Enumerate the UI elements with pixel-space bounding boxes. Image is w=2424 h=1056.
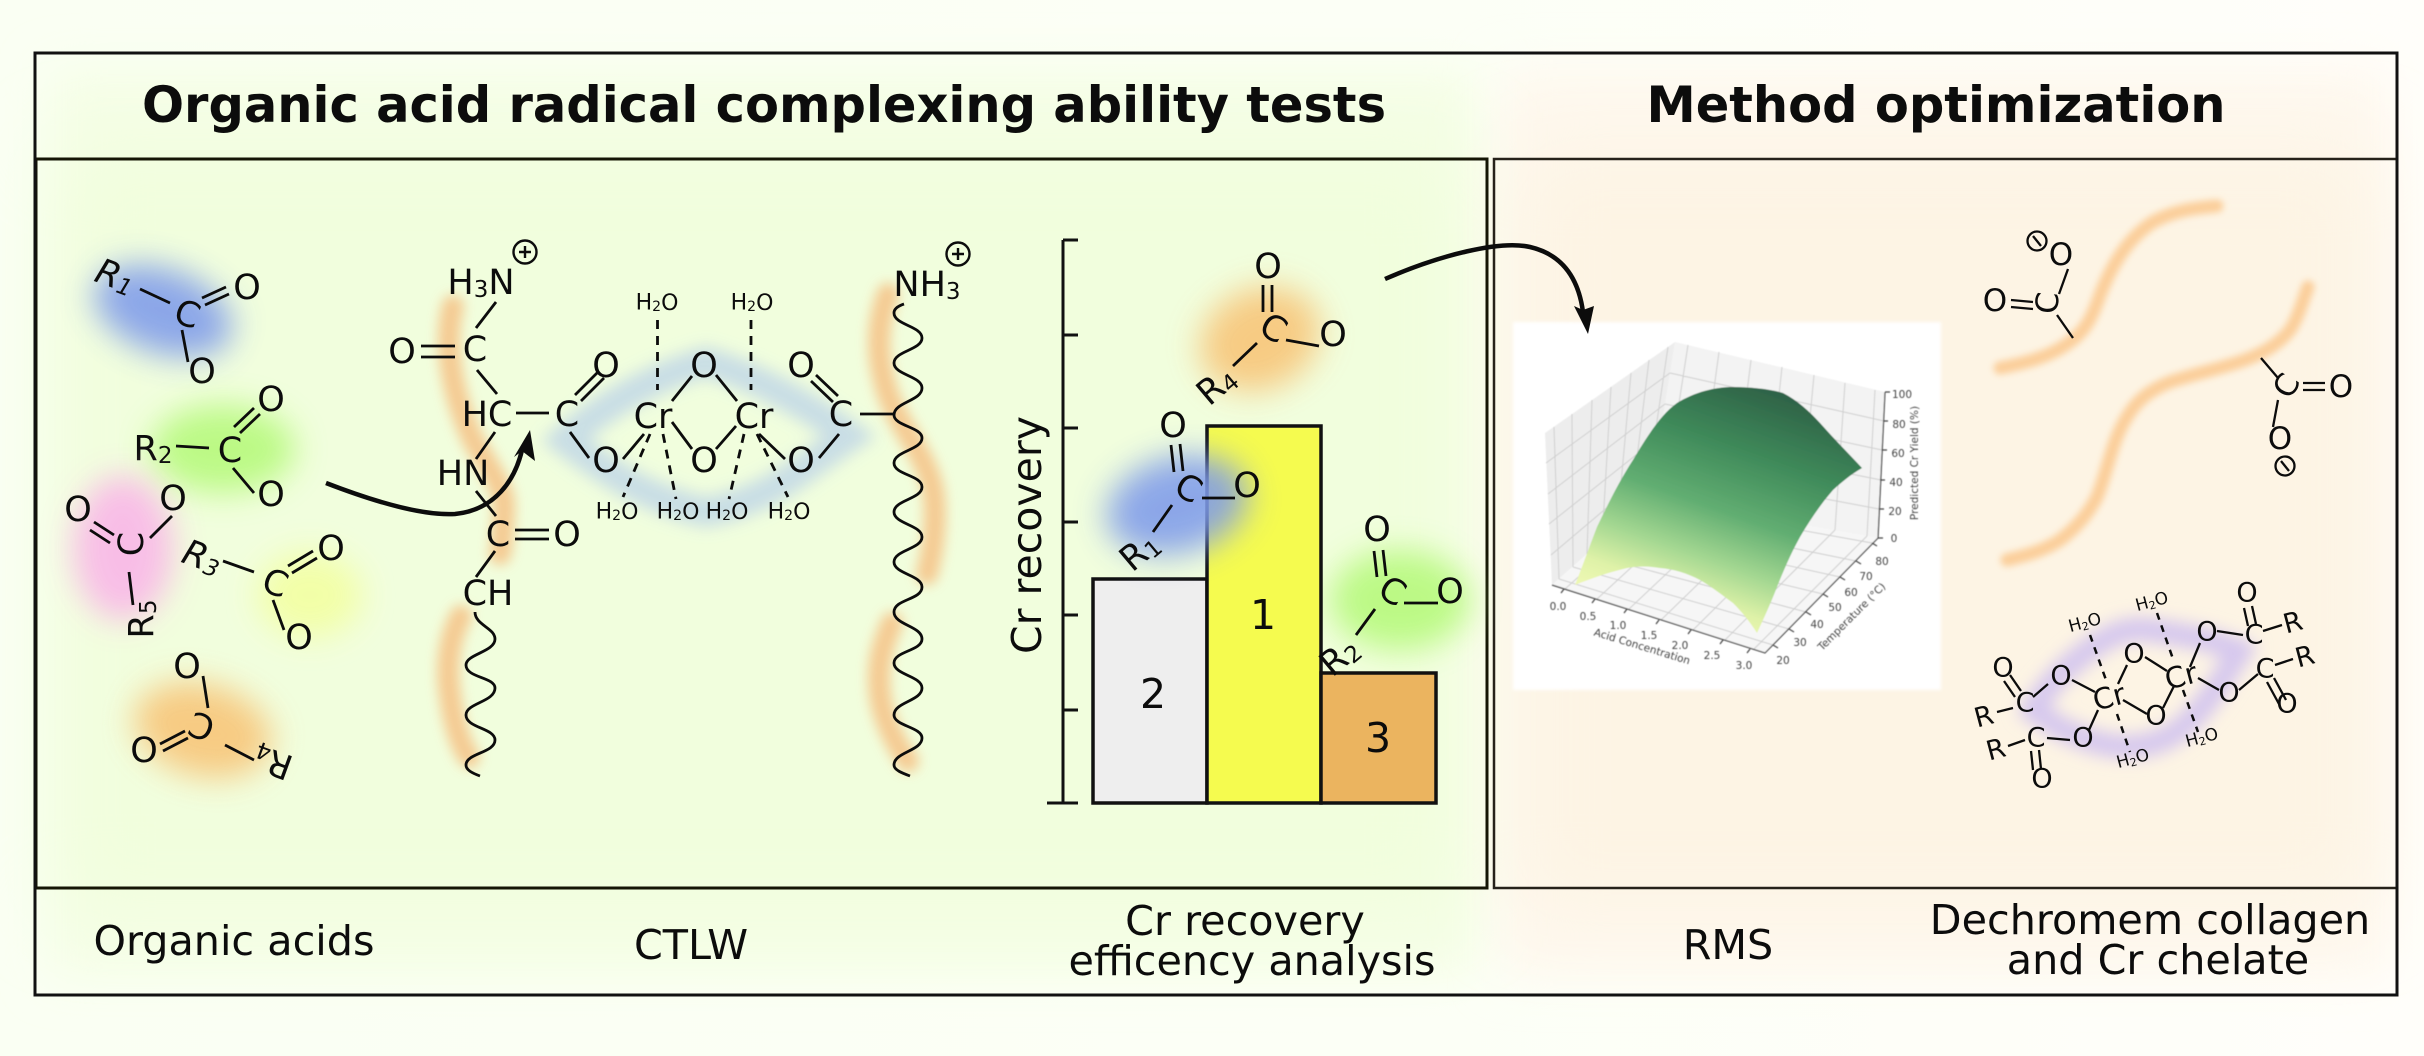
molecule: R3 carboxyl: O (317, 529, 345, 569)
CTLW atom labels: O (731, 500, 748, 524)
molecule: CTLW chromium tanned collagen (388, 240, 970, 776)
molecule: R5 carboxyl: 5 (136, 600, 162, 614)
molecule: carboxylate right: O (2329, 369, 2353, 405)
molecule: R5 carboxyl: O (64, 490, 92, 530)
molecule: Cr chelate: H (2114, 750, 2132, 773)
CTLW atom labels: Cr (735, 397, 774, 437)
molecule: R2 carboxyl (134, 380, 295, 515)
molecule: R4 on chart: O (1319, 315, 1347, 355)
molecule: carboxylate right: C (2266, 368, 2308, 404)
CTLW atom labels: 2 (784, 508, 793, 524)
3D chart labels: 30 (1793, 637, 1807, 649)
CTLW atom labels: 3 (474, 277, 488, 303)
molecule: R1 carboxyl: C (169, 292, 205, 338)
y axis with ticks (1047, 240, 1078, 803)
3D chart labels: 2.0 (1672, 640, 1688, 652)
side chain wavy lines (466, 612, 495, 776)
3D chart labels: 2.5 (1704, 650, 1720, 662)
molecule: Cr chelate: O (2134, 745, 2152, 768)
molecule: R1 on chart: 1 (1140, 535, 1168, 564)
arrow: chart to RMS (1385, 245, 1594, 334)
molecule: carboxylate upper left (1983, 232, 2073, 338)
molecule: R3 carboxyl: 3 (200, 554, 222, 583)
caption: dechromem collagen and Cr chelate (1930, 896, 2370, 984)
3D chart labels: 3.0 (1736, 660, 1752, 672)
molecule: R4 carboxyl: R (262, 741, 298, 786)
CTLW atom labels: O (388, 332, 416, 372)
CTLW atom labels: NH (893, 265, 946, 305)
CTLW atom labels: O (621, 500, 638, 524)
molecule: carboxylate right: O (2268, 421, 2292, 457)
molecule: R1 carboxyl: O (188, 352, 216, 392)
icon: positive charge right (946, 242, 970, 266)
molecule: Cr chelate: O (2196, 616, 2218, 648)
molecule: Cr chelate: O (2072, 722, 2094, 754)
3D chart labels: 0 (1891, 533, 1897, 545)
3D chart labels: 20 (1776, 655, 1790, 667)
molecule: Cr chelate: C (2245, 620, 2263, 650)
molecule: Cr chelate: R (2292, 640, 2318, 674)
3D chart labels: 60 (1844, 587, 1858, 599)
3D chart labels: Predicted Cr Yield (%) (1909, 406, 1921, 520)
molecule: R1 carboxyl: O (233, 268, 261, 308)
molecule: Cr chelate: H (2066, 614, 2084, 637)
caption: dechromem collagen and Cr chelate: and Cr chelate (2007, 936, 2309, 984)
molecule: Cr chelate: O (2153, 588, 2171, 611)
3D chart labels: 0.5 (1580, 611, 1596, 623)
molecule: R3 carboxyl: R (177, 533, 213, 578)
CTLW atom labels: 2 (673, 508, 682, 524)
caption: Cr recovery efficency analysis: efficency analysis (1068, 937, 1436, 985)
molecule: Cr chelate: O (2203, 724, 2221, 747)
CTLW atom labels: C (829, 395, 853, 435)
molecule: R1 carboxyl: R (90, 252, 126, 297)
molecule: R2 on chart: R (1312, 639, 1357, 685)
molecule: Cr chelate: C (2256, 654, 2274, 684)
CTLW atom labels: 3 (946, 279, 961, 305)
3D chart labels: Temperature (°C) (1815, 581, 1888, 654)
molecule: R4 carboxyl: O (173, 647, 201, 687)
molecule: Cr chelate: C (2016, 688, 2034, 718)
molecule: R1 on chart: R (1112, 534, 1157, 580)
molecule: R5 carboxyl: C (112, 532, 152, 556)
molecule: R1 carboxyl (81, 247, 261, 392)
molecule: R1 on chart: O (1159, 406, 1187, 446)
molecule: R2 on chart: O (1363, 510, 1391, 550)
molecule: R4 on chart: R (1189, 368, 1234, 414)
panel: organic acid tests (36, 159, 1487, 888)
CTLW atom labels: C (463, 330, 487, 370)
molecule: R2 carboxyl: O (257, 380, 285, 420)
molecule: R3 carboxyl: O (285, 618, 313, 658)
caption: RMS: RMS (1683, 921, 1773, 969)
yield surface (1575, 387, 1862, 633)
CTLW atom labels: H (657, 500, 673, 524)
chart background (1513, 322, 1941, 690)
CTLW atom labels: H (447, 263, 474, 303)
CTLW atom labels: CH (463, 574, 513, 614)
molecule: Cr chelate: R (1971, 700, 1997, 734)
molecule: R5 carboxyl: O (159, 479, 187, 519)
molecule: R1 on chart: O (1233, 466, 1261, 506)
CTLW atom labels: O (553, 515, 581, 555)
molecule: R1 on chart: C (1167, 466, 1209, 512)
title: organic acid radical complexing ability tests: Organic acid radical complexing ability tests (142, 76, 1386, 134)
chromium complex highlight (565, 362, 850, 512)
molecule: Cr chelate: 2 (2147, 598, 2158, 612)
panel: method optimization (1494, 159, 2397, 888)
molecule: Cr chelate: 2 (2080, 619, 2091, 633)
molecule: carboxylate upper left: O (1983, 283, 2007, 319)
molecule: Cr chelate: O (2050, 660, 2072, 692)
caption: organic acids: Organic acids (94, 917, 374, 965)
molecule: R4 carboxyl: C (184, 702, 220, 748)
CTLW atom labels: O (682, 500, 699, 524)
3D chart labels: 40 (1810, 619, 1824, 631)
molecule: Cr chelate: O (2031, 764, 2053, 794)
molecule: Cr chelate: 2 (2128, 755, 2139, 769)
molecule: Cr chelate: O (2145, 700, 2167, 732)
CTLW bonds (421, 302, 894, 577)
molecule: R4 carboxyl: 4 (253, 736, 275, 765)
CTLW atom labels: O (787, 441, 815, 481)
3D chart labels: 1.0 (1610, 620, 1626, 632)
molecule: carboxylate upper left: C (2029, 291, 2067, 315)
3D chart labels: 70 (1859, 571, 1873, 583)
CTLW atom labels: H (768, 500, 784, 524)
molecule: Cr chelate (1971, 578, 2318, 794)
CTLW atom labels: H (706, 500, 722, 524)
molecule: R4 on chart: C (1252, 306, 1294, 352)
molecule: R4 on chart: 4 (1217, 369, 1245, 398)
bar 3: 3 (1365, 714, 1391, 762)
3D chart labels: 0.0 (1550, 601, 1566, 613)
CTLW atom labels: H (731, 290, 747, 316)
3D chart labels: 80 (1892, 419, 1906, 431)
molecule: Cr chelate: O (2236, 578, 2258, 608)
molecule: Cr chelate: Cr (2161, 655, 2201, 697)
molecule: carboxylate upper left: O (2049, 237, 2073, 273)
bar 1: 1 (1250, 591, 1276, 639)
title: method optimization: Method optimization (1646, 76, 2226, 134)
molecule: Cr chelate: H (2183, 729, 2201, 752)
CTLW atom labels: O (592, 441, 620, 481)
3D chart labels: 60 (1891, 448, 1905, 460)
3D chart labels: 100 (1892, 389, 1912, 401)
molecule: R2 carboxyl: O (257, 475, 285, 515)
molecule: Cr chelate: O (1992, 652, 2014, 684)
CTLW atom labels: H (636, 290, 652, 316)
CTLW atom labels: 2 (652, 299, 661, 315)
CTLW atom labels: O (690, 441, 718, 481)
molecule: R2 on chart: O (1436, 572, 1464, 612)
molecule: Cr chelate: C (2027, 722, 2045, 754)
bar 2 (1093, 579, 1207, 803)
molecule: R2 carboxyl: C (218, 431, 242, 471)
bar chart: Cr recovery (1003, 240, 1470, 803)
collagen strand highlights (448, 294, 935, 761)
molecule: R2 carboxyl: 2 (158, 443, 172, 469)
CTLW atom labels: Cr (634, 397, 673, 437)
3D chart labels: 1.5 (1641, 630, 1657, 642)
molecule: R4 on chart: O (1254, 247, 1282, 287)
molecule: R2 on chart (1312, 510, 1464, 685)
R2 highlight (1330, 550, 1470, 650)
CTLW atom labels: O (690, 346, 718, 386)
molecule: R5 carboxyl: R (122, 614, 162, 638)
3D chart labels: 50 (1828, 602, 1842, 614)
CTLW atom labels: 2 (612, 508, 621, 524)
CTLW atom labels: N (488, 263, 515, 303)
3D axis panes (1545, 342, 1885, 653)
CTLW atom labels: O (756, 290, 773, 316)
CTLW atom labels: H (596, 500, 612, 524)
caption: Cr recovery efficency analysis (1068, 897, 1436, 985)
molecule: Cr chelate: O (2276, 688, 2298, 720)
molecule: carboxylate right (2261, 358, 2353, 476)
molecule: R3 carboxyl: C (257, 561, 293, 607)
icon: positive charge left (514, 240, 536, 264)
CTLW atom labels: 2 (747, 299, 756, 315)
CTLW atom labels: HN (437, 454, 489, 494)
molecule: R4 on chart (1183, 247, 1347, 414)
caption: Cr recovery efficency analysis: Cr recovery (1125, 897, 1365, 945)
molecule: R4 carboxyl (123, 647, 298, 793)
3D chart labels: Acid Concentration (1592, 627, 1692, 667)
CTLW atom labels: O (793, 500, 810, 524)
molecule: R3 carboxyl (177, 529, 362, 658)
molecule group: organic acids (64, 247, 362, 793)
molecule: Cr chelate: O (2218, 678, 2240, 708)
CTLW atom labels: O (661, 290, 678, 316)
molecule: R5 carboxyl (64, 476, 187, 638)
molecule: R2 carboxyl: R (134, 429, 158, 469)
bar 2: 2 (1140, 670, 1166, 718)
collagen strands (2000, 206, 2308, 560)
3D chart labels: 20 (1888, 506, 1902, 518)
CTLW atom labels: C (486, 515, 510, 555)
molecule: R2 on chart: C (1371, 569, 1413, 615)
molecule: R2 on chart: 2 (1340, 640, 1368, 669)
3D chart labels (1550, 389, 1921, 672)
response surface chart (1513, 322, 1941, 690)
molecule: Cr chelate: O (2086, 609, 2104, 632)
molecule: R1 on chart (1095, 406, 1261, 580)
molecule: Cr chelate: 2 (2197, 734, 2208, 748)
CTLW atom labels: HC (462, 395, 512, 435)
molecule: Cr chelate: H (2133, 593, 2151, 616)
molecule: R1 carboxyl: 1 (113, 273, 135, 302)
bar 3 (1321, 673, 1436, 803)
CTLW atom labels (388, 263, 961, 614)
molecule: Cr chelate: O (2123, 638, 2145, 670)
bar 1 (1207, 426, 1321, 803)
CTLW atom labels: C (555, 395, 579, 435)
3D chart labels: 40 (1889, 477, 1903, 489)
arrow: organic acids to CTLW (326, 430, 535, 514)
molecule group: dechromed collagen and Cr chelate (1971, 206, 2353, 794)
CTLW atom labels: 2 (722, 508, 731, 524)
3D axis lines (1552, 392, 1890, 653)
molecule: Cr chelate: R (2280, 606, 2306, 640)
caption: dechromem collagen and Cr chelate: Dechromem collagen (1930, 896, 2370, 944)
y axis title: Cr recovery (1003, 416, 1051, 654)
CTLW atom labels: O (592, 346, 620, 386)
molecule: R4 carboxyl: O (130, 731, 158, 771)
3D chart labels: 80 (1875, 556, 1889, 568)
molecule: Cr chelate: Cr (2089, 676, 2129, 718)
molecule: Cr chelate: R (1983, 733, 2009, 767)
CTLW atom labels: O (787, 346, 815, 386)
caption: CTLW: CTLW (634, 921, 748, 969)
